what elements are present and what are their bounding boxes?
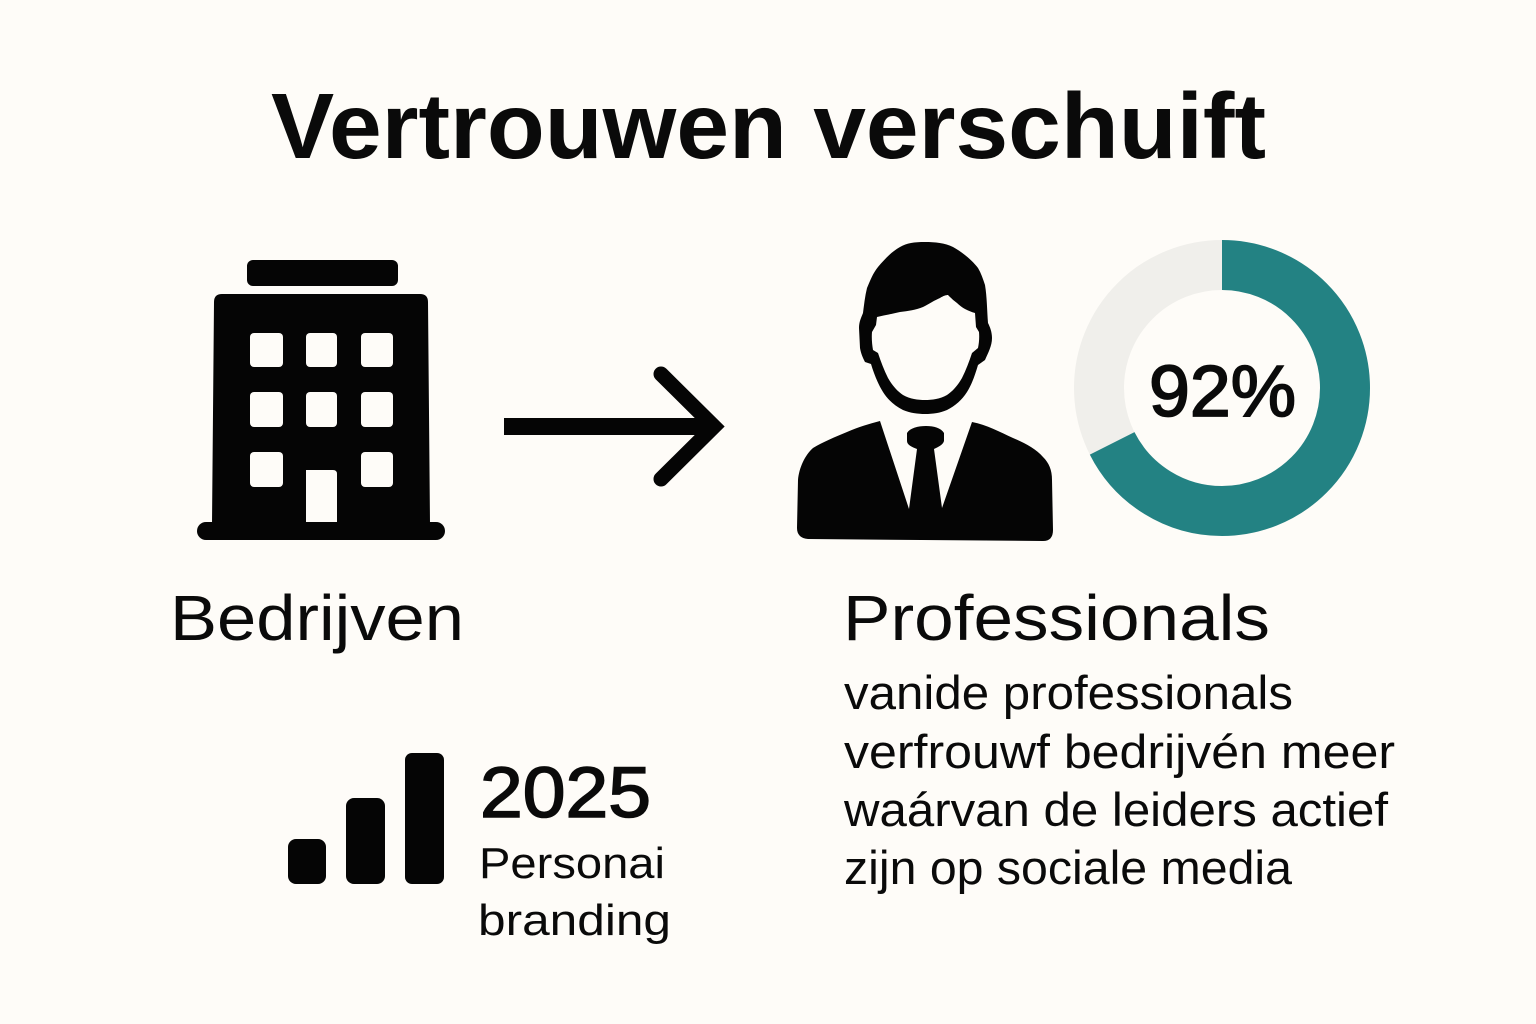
text block: professionals description: waárvan de leiders actief — [843, 783, 1389, 836]
text block: professionals description: vanide professionals — [844, 666, 1293, 719]
year: 2025: 2025 — [480, 754, 651, 833]
text block: professionals description: verfrouwf bedrijvén meer — [844, 725, 1395, 778]
donut chart: 92% — [1099, 265, 1345, 511]
icon: professional in suit — [797, 242, 1053, 541]
text block: personal branding: Personai — [479, 839, 665, 888]
label: Professionals: Professionals — [843, 582, 1270, 654]
donut chart: 92%: 92% — [1149, 352, 1296, 432]
icon: office building — [197, 260, 445, 540]
arrow — [504, 374, 714, 479]
text block: personal branding — [478, 839, 671, 945]
title: Vertrouwen verschuift — [271, 74, 1266, 178]
text block: personal branding: branding — [478, 896, 671, 945]
icon: bar chart — [288, 753, 444, 884]
label: Bedrijven: Bedrijven — [170, 582, 464, 654]
text block: professionals description — [843, 666, 1395, 894]
text block: professionals description: zijn op sociale media — [844, 841, 1293, 894]
